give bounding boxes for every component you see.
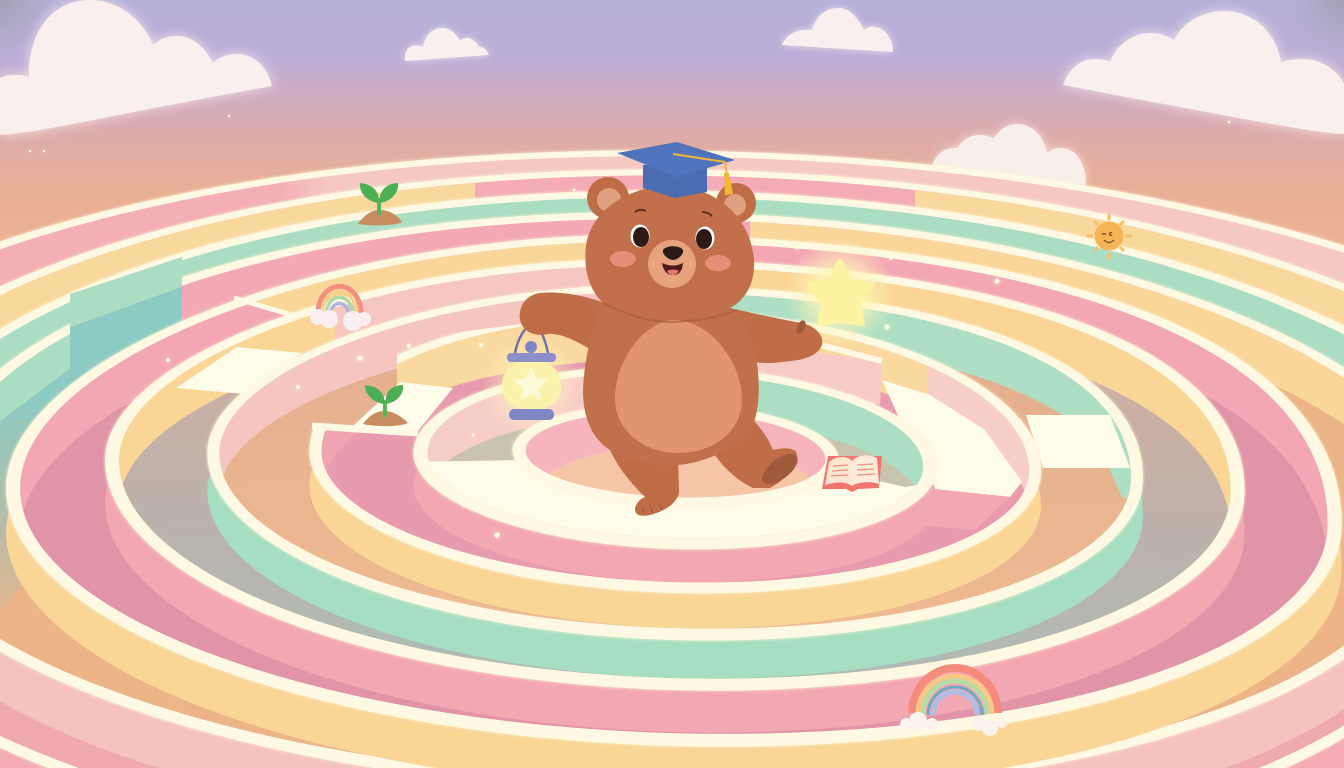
cream path block by sprout bbox=[352, 382, 453, 432]
ring: mint band bbox=[0, 162, 1344, 768]
eyebrows bbox=[635, 210, 712, 216]
cream bridge: left bbox=[176, 347, 302, 394]
sparkles bbox=[29, 115, 1230, 538]
icon: sprout lower bbox=[363, 385, 408, 426]
icon: sprout upper bbox=[358, 183, 402, 225]
wall gap: teal passage on the left bbox=[70, 257, 182, 500]
left ear bbox=[587, 177, 629, 219]
cloud: small upper centre-left bbox=[405, 28, 489, 61]
ring: pink and yellow inner wall bbox=[0, 200, 1344, 768]
cream bridge: right bbox=[1026, 415, 1130, 468]
right arm bbox=[725, 308, 822, 363]
ring: outermost pale band bbox=[0, 148, 1344, 286]
right ear bbox=[716, 183, 756, 223]
ring: yellow wall with grey floor bbox=[98, 230, 1251, 750]
lantern bbox=[481, 327, 581, 435]
ring: mint and pale wall with tan floor bbox=[206, 285, 1145, 678]
left leg bbox=[608, 445, 679, 516]
icon: open book bbox=[822, 455, 882, 492]
cross wall bbox=[234, 298, 292, 315]
bear character bbox=[481, 142, 822, 516]
neck crease bbox=[603, 303, 737, 322]
left arm bbox=[520, 292, 610, 352]
body bbox=[583, 296, 759, 465]
icon: small rainbow bbox=[310, 286, 371, 331]
ring: partial yellow wall with pink floor bbox=[308, 312, 1043, 628]
graduation cap bbox=[617, 142, 735, 198]
short pale wall right of bear bbox=[757, 340, 882, 405]
cloud: small upper centre-right bbox=[782, 8, 893, 52]
cloud: top left bbox=[0, 0, 272, 135]
sky background bbox=[0, 0, 1344, 300]
icon: large rainbow bbox=[900, 668, 1007, 736]
cloud: top right bbox=[1063, 11, 1344, 134]
cloud: behind maze rim bbox=[932, 124, 1086, 185]
icon: sun bbox=[1087, 214, 1132, 259]
ring: inner pink wall with cream floor bbox=[412, 367, 938, 582]
head bbox=[585, 186, 754, 319]
eyes bbox=[630, 224, 714, 250]
cheeks bbox=[610, 251, 731, 271]
ring: centre with peach floor bbox=[511, 408, 840, 509]
right leg bbox=[712, 420, 803, 490]
belly bbox=[615, 320, 742, 453]
partial wall cap bbox=[312, 426, 418, 433]
ring: wall with left gap bbox=[0, 187, 1344, 768]
muzzle and mouth bbox=[648, 240, 696, 288]
icon: glowing star bbox=[785, 238, 895, 348]
